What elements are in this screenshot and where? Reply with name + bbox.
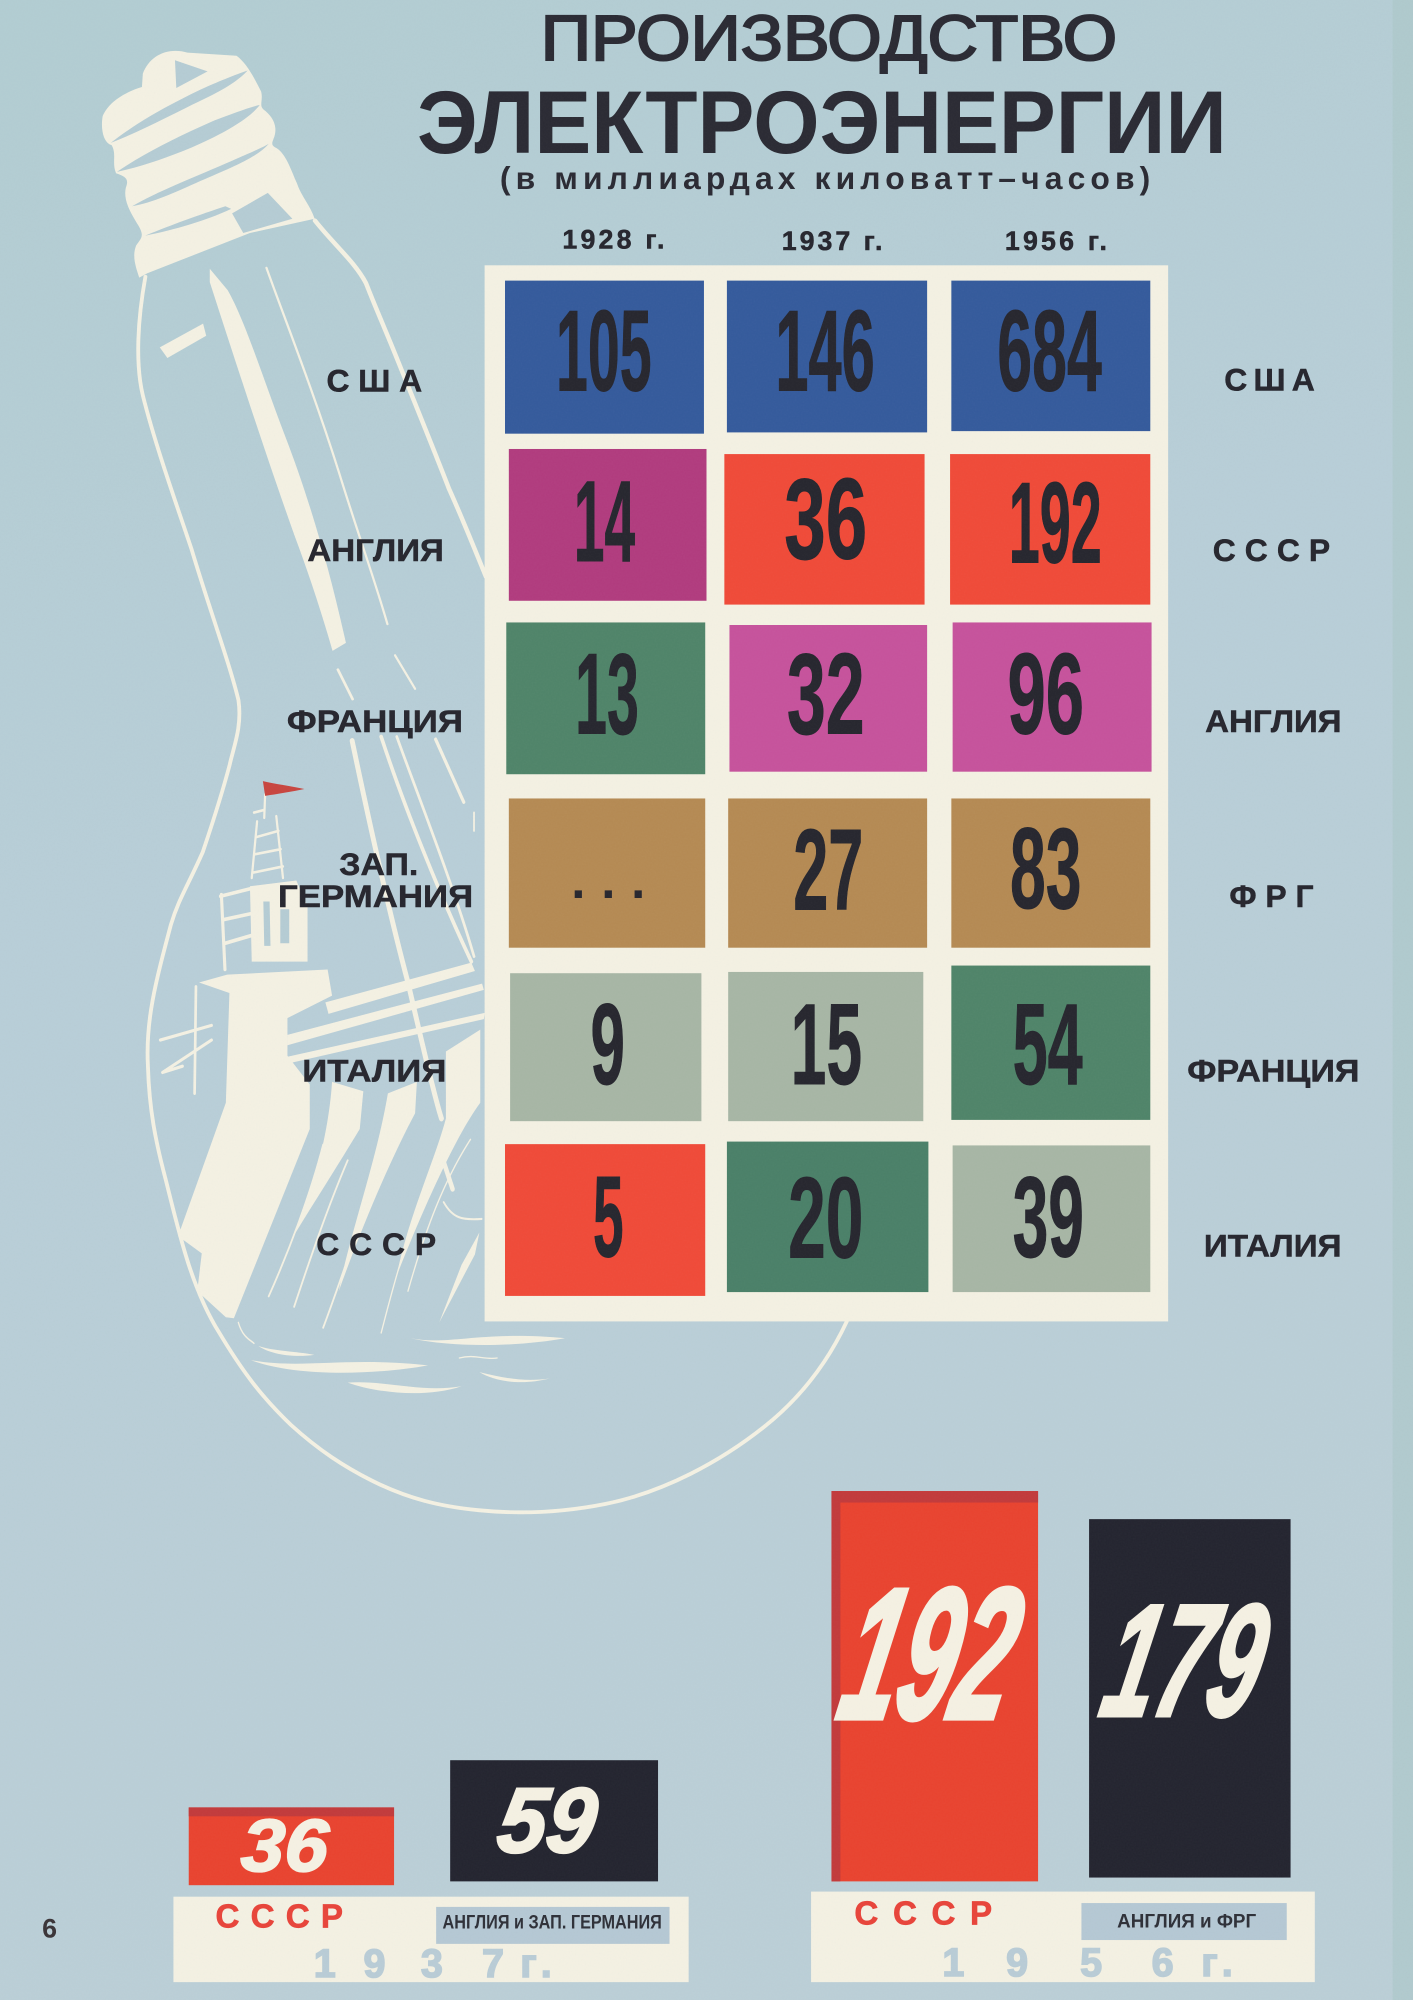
control house: [220, 881, 308, 969]
bar: England and FRG 179: 179: [1089, 1572, 1283, 1750]
bar chart: 1937 comparison: [173, 1760, 689, 1986]
cell: FRG 1956: 83: [1010, 805, 1081, 933]
bar chart: 1956 comparison: [811, 1491, 1315, 1985]
USSR legend label: СССР: [216, 1898, 343, 1935]
label England: АНГЛИЯ: [1205, 703, 1342, 739]
label France: ФРАНЦИЯ: [1187, 1053, 1359, 1089]
year 1956: 1956 г.: [1005, 226, 1107, 256]
cell: Italy 1928: [510, 973, 701, 1121]
year headers: [562, 225, 1107, 256]
cell: USA 1956: 684: [997, 287, 1102, 415]
cell: West Germany 1937: 27: [793, 806, 863, 934]
cell: Italy 1956: [953, 1145, 1150, 1292]
cell: Italy 1937: 15: [791, 981, 862, 1109]
cell: USSR 1937: 36: [784, 456, 867, 584]
legend panel 1956: [811, 1892, 1315, 1985]
spillway piers: [292, 1030, 480, 1291]
label West Germany line 1: ЗАП.: [339, 846, 418, 882]
cell: Italy 1928: 9: [590, 981, 625, 1109]
cell: Italy 1956: 39: [1013, 1153, 1084, 1281]
bridge deck: [287, 963, 485, 1064]
bulb outline: [138, 221, 847, 1512]
cell: USSR 1928: 5: [593, 1153, 624, 1281]
bulb inner filament and glints: [160, 268, 415, 699]
cell: France 1928: [506, 622, 705, 774]
legend box: England and FRG: АНГЛИЯ и ФРГ: [1117, 1910, 1256, 1932]
panel: data table: [485, 265, 1168, 1321]
bar: USSR 192: [826, 1491, 1038, 1881]
subtitle: (в миллиардах киловатт–часов): [500, 160, 1150, 196]
cell: England 1928: [509, 449, 706, 601]
cell: England 1937: 32: [787, 630, 865, 758]
cell: England 1928: 14: [574, 458, 635, 586]
cell: England 1956: 96: [1007, 630, 1084, 758]
USSR legend label: СССР: [854, 1896, 992, 1933]
water waves: [238, 1322, 565, 1393]
red flag: [263, 781, 304, 796]
cell: USA 1928: 105: [556, 287, 652, 415]
title line 1: ПРОИЗВОДСТВО: [541, 2, 1117, 74]
year 1937: 1937 г.: [782, 226, 882, 256]
illustration: light bulb with hydroelectric dam: [102, 51, 847, 1512]
label FRG: ФРГ: [1229, 878, 1314, 914]
hydroelectric dam: [160, 737, 565, 1393]
cell: USA 1937: [727, 281, 927, 432]
main dam tower: [178, 969, 332, 1318]
label Italy: ИТАЛИЯ: [302, 1053, 446, 1089]
label USA: США: [326, 363, 422, 399]
bar: England and West Germany 59: [450, 1760, 658, 1881]
cell: France 1937: 20: [788, 1155, 863, 1283]
water streaks: [269, 1139, 482, 1333]
cell: USA 1956: [951, 281, 1150, 431]
bar: USSR 36: 36: [239, 1804, 332, 1887]
cell: West Germany 1937: [728, 798, 927, 948]
cell: USSR 1956: 192: [1009, 459, 1102, 588]
cell: USSR 1928: [505, 1144, 705, 1296]
label USSR: СССР: [316, 1226, 436, 1262]
legend box: England and West Germany: [436, 1907, 670, 1944]
cell: FRG 1956: [951, 798, 1150, 948]
label France: ФРАНЦИЯ: [287, 703, 463, 739]
page number: 6: [42, 1913, 57, 1944]
tower side lines: [160, 987, 212, 1093]
cell: West Germany 1928: [509, 798, 705, 948]
cell: USA 1937: 146: [775, 287, 875, 415]
lattice tower: [252, 794, 283, 878]
cell: France 1956: 54: [1013, 981, 1083, 1109]
label USSR: СССР: [1213, 532, 1330, 568]
cell: USSR 1937: [724, 454, 925, 605]
legend panel 1937: [173, 1897, 689, 1986]
right country labels: [1187, 361, 1359, 1263]
cell: England 1956: [953, 622, 1152, 772]
label USA: США: [1224, 361, 1315, 397]
cell: France 1956: [951, 966, 1150, 1120]
bar: USSR 36: [189, 1804, 394, 1887]
cell: USSR 1956: [950, 454, 1150, 605]
title line 2: ЭЛЕКТРОЭНЕРГИИ: [417, 72, 1227, 172]
bar: England and West Germany 59: 59: [492, 1768, 603, 1872]
cell: France 1928: 13: [575, 630, 639, 758]
legend box: England and FRG: [1081, 1903, 1287, 1940]
left country labels: [278, 363, 473, 1262]
label Italy: ИТАЛИЯ: [1204, 1227, 1342, 1263]
cell: England 1937: [729, 625, 927, 772]
title: [417, 2, 1227, 196]
label West Germany line 2: ГЕРМАНИЯ: [278, 878, 473, 914]
year 1928: 1928 г.: [562, 225, 664, 255]
bar: England and FRG 179: [1089, 1519, 1291, 1878]
legend box: England and West Germany: АНГЛИЯ и ЗАП. ГЕРМАНИЯ: [443, 1912, 662, 1934]
cell: Italy 1937: [728, 972, 923, 1121]
cell: France 1937: [727, 1142, 928, 1292]
year label 1956: 1956г.: [942, 1941, 1233, 1985]
girder lines: [352, 737, 474, 1189]
cell: USA 1928: [505, 281, 704, 434]
year label 1937: 1937г.: [314, 1942, 552, 1986]
cell: West Germany 1928: ...: [571, 852, 645, 909]
label England: АНГЛИЯ: [307, 532, 444, 568]
bulb screw base: [102, 51, 315, 278]
bar: USSR 192: 192: [826, 1550, 1038, 1758]
